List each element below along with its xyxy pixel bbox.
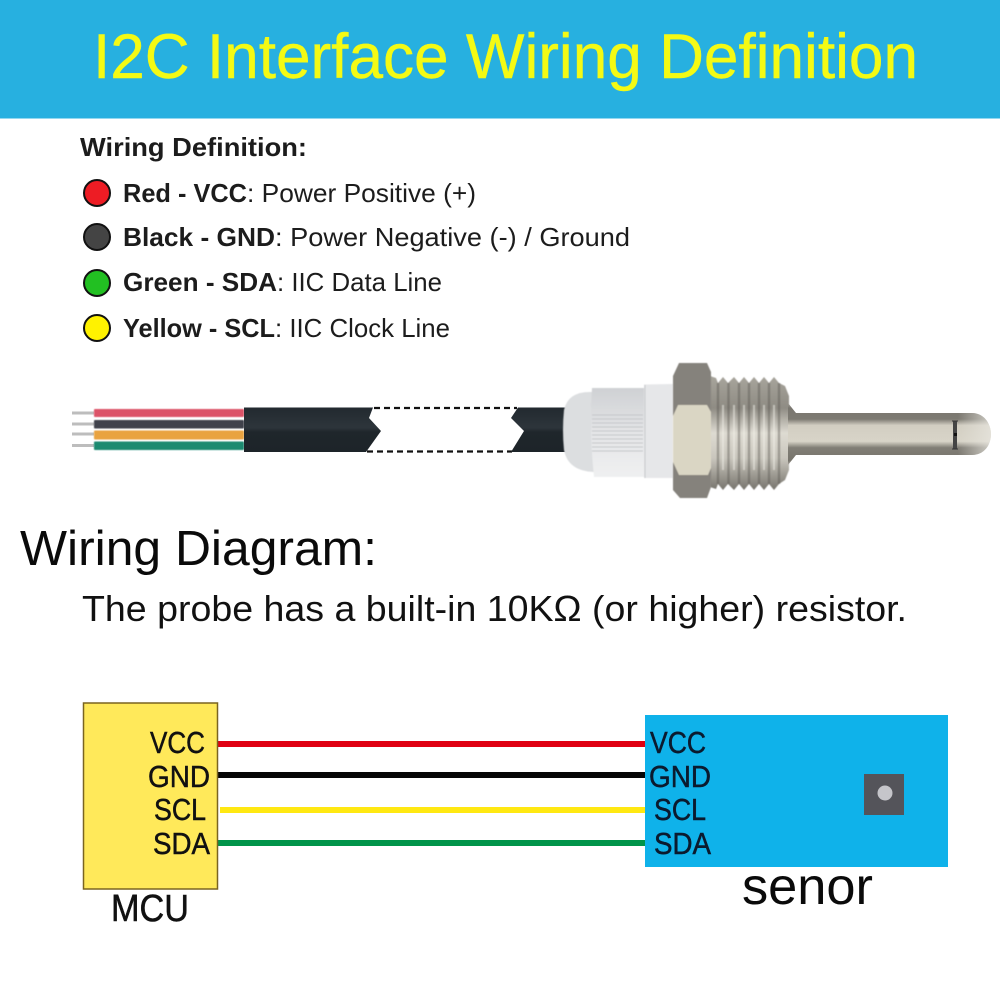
panel: wiring definition legend (80, 132, 630, 343)
heading: wiring diagram: Wiring Diagram: (20, 522, 377, 576)
threaded section (710, 376, 789, 490)
sensor block: VCC (650, 725, 706, 760)
wire tips (72, 412, 94, 447)
hex nut (673, 363, 711, 498)
sensor block: GND (649, 759, 711, 794)
legend item: red VCC: : Power Positive (+) (247, 178, 476, 208)
legend item: black GND: Black - GND (123, 222, 275, 252)
MCU block: GND (148, 759, 210, 794)
connection lines (218, 741, 645, 846)
legend heading: Wiring Definition: (80, 132, 307, 162)
MCU block: VCC (150, 725, 205, 760)
legend item: green SDA: : IIC Data Line (277, 267, 442, 297)
resistor note: The probe has a built-in 10KΩ (or higher) resistor. (82, 588, 907, 629)
MCU block: SDA (153, 826, 210, 861)
cable right section (511, 408, 566, 452)
MCU block: SCL (154, 792, 206, 827)
title: I2C Interface Wiring Definition (93, 22, 918, 92)
legend item: red VCC (84, 178, 476, 208)
sensor block: SDA (654, 826, 711, 861)
legend item: yellow SCL: : IIC Clock Line (275, 313, 450, 343)
sensor chip icon (864, 774, 904, 815)
wiring diagram (84, 703, 948, 930)
legend item: yellow SCL (84, 313, 450, 343)
cable cut dashed lines (367, 408, 517, 452)
sensor block: SCL (654, 792, 706, 827)
legend item: yellow SCL: Yellow - SCL (123, 313, 275, 343)
legend item: green SDA: Green - SDA (123, 267, 277, 297)
sensor block (645, 715, 948, 867)
cable gland (563, 384, 673, 478)
cable left section (244, 408, 381, 452)
legend item: red VCC: Red - VCC (123, 178, 247, 208)
wires (94, 409, 244, 450)
MCU block (84, 703, 218, 889)
legend item: green SDA (84, 267, 442, 297)
header banner (0, 0, 1000, 118)
MCU label: MCU (111, 888, 189, 930)
legend item: black GND: : Power Negative (-) / Ground (275, 222, 630, 252)
probe illustration (72, 363, 991, 498)
legend item: black GND (84, 222, 630, 252)
probe shaft (788, 403, 991, 465)
sensor label: senor (742, 858, 873, 916)
